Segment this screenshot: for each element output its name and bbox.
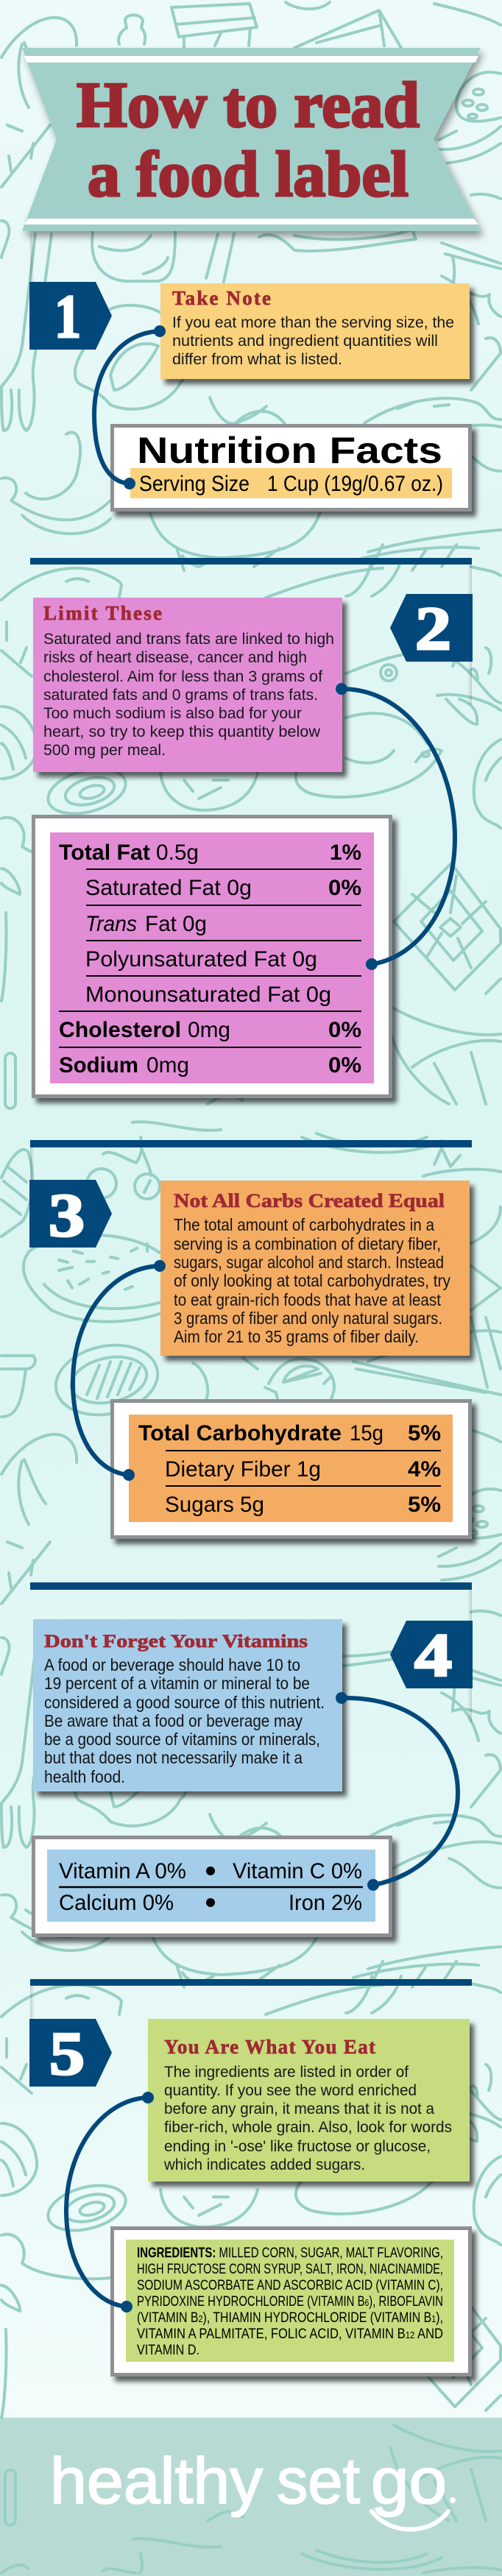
badge 5 <box>29 2019 112 2088</box>
panel: fat label: Saturated Fat 0g <box>85 876 252 900</box>
panel: ingredients label: SODIUM ASCORBATE AND ASCORBIC ACID (VITAMIN C), <box>137 2278 443 2293</box>
panel: ingredients label <box>112 2229 470 2374</box>
panel: carbs: serving is a combination of dietary fiber, <box>174 1234 441 1253</box>
step 1 section <box>29 234 470 509</box>
connector arrow 4 <box>336 1692 458 1891</box>
badge 1 <box>29 282 112 351</box>
panel: fat label: Trans <box>85 912 137 936</box>
divider <box>30 1979 472 1986</box>
panel: you are what you eat: You Are What You Eat <box>164 2036 375 2058</box>
panel: fat label: Monounsaturated Fat 0g <box>85 983 331 1007</box>
panel: carbohydrate label: 5% <box>408 1493 441 1517</box>
panel: take note: Take Note <box>172 287 271 309</box>
panel: limit these: cholesterol. Aim for less than 3 grams of <box>43 668 322 685</box>
divider <box>30 1582 472 1590</box>
panel: ingredients label: PYRIDOXINE HYDROCHLORIDE (VITAMIN B6), RIBOFLAVIN <box>137 2294 443 2310</box>
panel: fat label: Total Fat <box>59 841 150 865</box>
panel: carbohydrate label: 15g <box>350 1421 383 1446</box>
panel: limit these: 500 mg per meal. <box>43 742 166 759</box>
panel: fat label: 0mg <box>188 1018 230 1042</box>
panel: limit these <box>33 598 342 772</box>
panel: fat label: 1% <box>330 841 361 865</box>
badge 3: 3 <box>49 1181 85 1250</box>
connector arrow 2 <box>336 683 455 970</box>
panel: carbs: of only looking at total carbohydrates, try <box>174 1271 450 1290</box>
panel: vitamin label: Vitamin A 0% <box>59 1859 186 1883</box>
panel: nutrition facts header: 1 Cup (19g/0.67 oz.) <box>267 472 443 496</box>
panel: carbs: The total amount of carbohydrates in a <box>174 1215 434 1234</box>
panel: fat label: Cholesterol <box>59 1018 181 1042</box>
panel: fat label: 0% <box>328 1053 361 1078</box>
step 3 section <box>29 1147 470 1537</box>
panel: carbs: Aim for 21 to 35 grams of fiber daily. <box>174 1327 419 1346</box>
badge 4 <box>390 1621 473 1690</box>
panel: vitamin label: Iron 2% <box>289 1891 362 1915</box>
step 5 section <box>29 1986 470 2374</box>
panel: nutrition facts header: Nutrition Facts <box>137 430 442 471</box>
panel: you are what you eat: fiber-rich, whole grain. Also, look for words <box>164 2119 452 2136</box>
connector arrow 5 <box>66 2092 154 2313</box>
title: a food label <box>88 139 409 210</box>
panel: you are what you eat: The ingredients are listed in order of <box>164 2064 409 2081</box>
panel: vitamin label: Vitamin C 0% <box>233 1859 362 1883</box>
connector arrow 3 <box>73 1260 166 1481</box>
panel: vitamins: Don't Forget Your Vitamins <box>44 1632 308 1652</box>
panel: ingredients label: (VITAMIN B2), THIAMIN HYDROCHLORIDE (VITAMIN B1), <box>137 2310 443 2326</box>
badge 4: 4 <box>414 1621 452 1690</box>
panel: vitamins: A food or beverage should have 10 to <box>44 1655 300 1674</box>
panel: carbohydrate label <box>112 1401 470 1537</box>
panel: fat label: 0mg <box>146 1053 189 1078</box>
panel: you are what you eat: which indicates added sugars. <box>163 2156 365 2173</box>
panel: vitamins: Be aware that a food or beverage may <box>44 1711 303 1730</box>
footer logo <box>50 2444 456 2530</box>
panel: you are what you eat: quantity. If you see the word enriched <box>164 2082 417 2099</box>
title banner <box>22 48 481 231</box>
panel: fat label: Fat 0g <box>145 912 207 936</box>
panel: limit these: risks of heart disease, cancer and high <box>43 649 307 666</box>
panel: you are what you eat: ending in '-ose' like fructose or glucose, <box>164 2138 431 2155</box>
panel: fat label: 0% <box>328 876 361 900</box>
panel: limit these: Limit These <box>43 602 162 624</box>
panel: fat label: 0.5g <box>156 841 199 865</box>
title: How to read <box>77 70 420 141</box>
panel: fat label <box>34 817 390 1097</box>
panel: carbs: sugars, sugar alcohol and starch. Instead <box>174 1253 444 1272</box>
panel: carbohydrate label: Sugars 5g <box>165 1493 264 1517</box>
panel: nutrition facts header <box>112 425 470 509</box>
title <box>77 70 420 210</box>
panel: carbohydrate label: 4% <box>408 1457 441 1482</box>
divider <box>30 558 472 565</box>
panel: carbohydrate label: Total Carbohydrate <box>138 1421 342 1446</box>
panel: take note: If you eat more than the serving size, the <box>172 314 454 331</box>
panel: vitamins: be a good source of vitamins or minerals, <box>44 1730 320 1749</box>
panel: vitamins: health food. <box>44 1767 125 1786</box>
connector arrow 1 <box>94 325 166 489</box>
panel: carbohydrate label: 5% <box>408 1421 441 1446</box>
panel: ingredients label: VITAMIN A PALMITATE, FOLIC ACID, VITAMIN B12 AND <box>137 2326 443 2342</box>
panel: limit these: Saturated and trans fats are linked to high <box>43 631 334 648</box>
footer logo: set <box>277 2444 360 2517</box>
panel: carbohydrate label: Dietary Fiber 1g <box>165 1457 321 1482</box>
panel: vitamins: considered a good source of this nutrient. <box>44 1693 325 1712</box>
panel: carbs: to eat grain-rich foods that have at least <box>174 1290 442 1309</box>
panel: take note: nutrients and ingredient quantities will <box>172 333 438 350</box>
panel: limit these: Too much sodium is also bad for your <box>43 705 302 722</box>
panel: you are what you eat <box>148 2019 470 2182</box>
panel: vitamin label: Calcium 0% <box>59 1891 174 1915</box>
footer logo: go <box>371 2444 447 2517</box>
footer band <box>0 2418 502 2576</box>
panel: fat label: Sodium <box>59 1053 138 1078</box>
panel: vitamin label <box>34 1837 390 1936</box>
panel: fat label: 0% <box>328 1018 361 1042</box>
panel: nutrition facts header: Serving Size <box>139 472 250 496</box>
panel: vitamins: but that does not necessarily make it a <box>44 1748 303 1767</box>
panel: vitamins <box>33 1619 342 1791</box>
panel: ingredients label: VITAMIN D. <box>137 2343 199 2358</box>
panel: fat label: Polyunsaturated Fat 0g <box>85 947 317 972</box>
panel: take note <box>160 283 470 379</box>
step 2 section <box>33 565 473 1097</box>
panel: take note: differ from what is listed. <box>172 351 342 368</box>
panel: carbs <box>160 1181 470 1356</box>
footer logo: healthy <box>50 2444 263 2517</box>
badge 2: 2 <box>415 595 451 663</box>
panel: vitamins: 19 percent of a vitamin or mineral to be <box>44 1674 310 1693</box>
step 4 section <box>33 1590 473 1936</box>
panel: carbs: 3 grams of fiber and only natural sugars. <box>174 1309 442 1328</box>
panel: you are what you eat: before any grain, it means that it is not a <box>164 2101 434 2117</box>
badge 1: 1 <box>54 283 81 351</box>
panel: limit these: saturated fats and 0 grams of trans fats. <box>43 687 318 704</box>
badge 5: 5 <box>49 2020 85 2088</box>
panel: carbs: Not All Carbs Created Equal <box>174 1190 445 1211</box>
panel: limit these: heart, so try to keep this quantity below <box>43 723 321 740</box>
divider <box>30 1140 472 1147</box>
panel: ingredients label: INGREDIENTS: MILLED CORN, SUGAR, MALT FLAVORING, <box>137 2246 443 2261</box>
badge 2 <box>390 594 473 663</box>
badge 3 <box>29 1180 112 1250</box>
